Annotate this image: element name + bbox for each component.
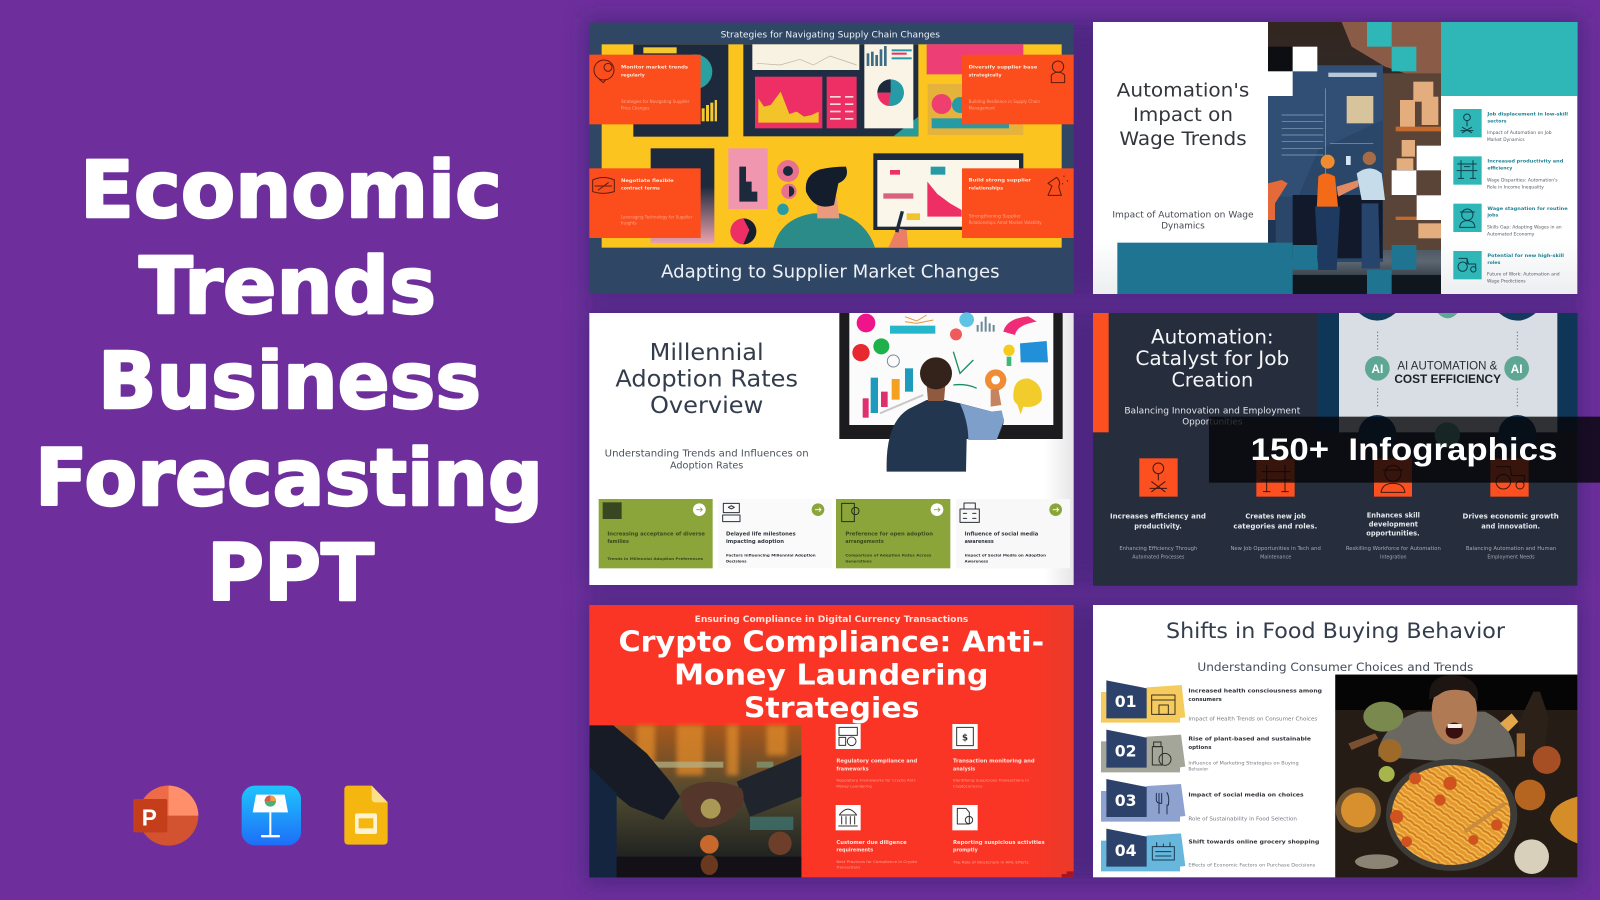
item: regulatory compliance: Money Laundering [836,784,872,789]
item: high-skill roles: Potential for new high-skill [1487,253,1564,259]
row 02: 02 [1115,742,1137,761]
row 01: consumers [1188,697,1222,703]
callout: monitor market trends [589,55,701,124]
item: transaction monitoring: Transaction monitoring and [953,759,1035,765]
card: open adoption: arrangements [845,539,884,545]
slide subtitle: Understanding Consumer Choices and Trends [1197,660,1473,674]
callout: monitor market trends: regularly [621,72,645,78]
illustration: analyst at yellow dashboard wall [602,44,1062,248]
item: reporting suspicious activities: Reporting suspicious activities [953,840,1045,846]
slide title: Creation [1171,369,1253,392]
item: efficiency: Enhancing Efficiency Through [1119,546,1197,552]
item: customer due diligence: Customer due diligence [836,840,907,846]
slide title: Impact on [1133,104,1233,126]
panel: millennial adoption rates [589,312,1074,585]
icon: building [960,503,979,522]
icon: Keynote [242,786,301,845]
item: customer due diligence: Transactions [835,865,860,870]
item: new jobs: New Job Opportunities in Tech and [1230,546,1321,552]
item: productivity: Increased productivity and [1487,159,1563,165]
card: social media awareness: Impact of Social Media on Adoption [965,553,1046,558]
callout: negotiate flexible contract terms: Leveraging Technology for Supplier [621,214,693,219]
icon: contract [593,177,614,193]
icon: robot arm [1150,463,1167,492]
row 04: 04 [1115,841,1137,860]
illustration: warehouse workers [1268,22,1441,294]
arrow button [693,503,706,516]
callout: monitor market trends: Price Changes [621,105,649,110]
item: wage stagnation: jobs [1486,213,1498,219]
row 01: 01 [1115,692,1137,711]
slide title: Strategies [744,691,919,724]
item: growth [1462,458,1559,560]
row 03: 03 [1115,791,1137,810]
item: productivity: Wage Disparities: Automation's [1487,177,1558,183]
slide title: Shifts in Food Buying Behavior [1166,619,1505,644]
item: new jobs: categories and roles. [1233,523,1317,531]
card: open adoption: Preference for open adoption [845,531,934,537]
title: Business [98,337,481,427]
panel: crypto compliance [589,605,1074,877]
callout: diversify supplier base: Management [969,105,995,110]
callout: monitor market trends: Monitor market trends [621,65,688,71]
callout: build strong supplier relationships: Build strong supplier [969,178,1032,184]
card: social media awareness [956,499,1070,568]
item: high-skill roles [1453,251,1564,285]
illustration: AI automation poster: AI [1371,362,1383,376]
icon: document with pin [842,503,859,522]
slide subtitle: Strategies for Navigating Supply Chain Changes [721,30,940,40]
icon: certificate [957,808,973,824]
icon: robot arm [1461,114,1473,133]
callout: diversify supplier base [962,55,1074,124]
item: high-skill roles: Wage Predictions [1487,279,1526,285]
icon: bank [839,809,857,826]
card: diverse families [599,499,713,568]
item: reporting suspicious activities [952,805,1045,865]
item: new jobs: Maintenance [1260,554,1291,560]
slide title: Adoption Rates [615,365,798,393]
panel: automation job creation [1093,313,1600,586]
illustration: man at whiteboard [839,312,1063,472]
card: delayed life milestones [718,499,832,568]
illustration: AI automation poster: COST EFFICIENCY [1394,372,1501,386]
icon: laptop graduation [723,503,740,522]
title: Trends [139,242,436,332]
item: reporting suspicious activities: The Role of Blockchain in AML Efforts [952,860,1029,865]
item: transaction monitoring [952,724,1035,789]
callout: build strong supplier relationships [962,168,1074,238]
row 02 [1101,730,1311,772]
slide title [1135,325,1289,392]
icon: tractor [1496,467,1524,489]
row 02: Behavior [1188,766,1208,772]
title: Economic [80,146,502,236]
row 01 [1101,680,1322,723]
illustration: AI automation poster [1317,313,1577,453]
card: diverse families: Trends in Millennial Adoption Preferences [607,556,704,561]
item: customer due diligence: requirements [836,848,873,854]
slide subtitle: Impact of Automation on Wage [1112,210,1254,220]
photo: laughing man with food [1335,675,1577,877]
panel: automation wage trends [1093,22,1577,294]
icon: qr code [603,502,622,519]
corner mark [1062,871,1074,877]
slide subtitle [1124,406,1301,427]
item: job displacement: sectors [1487,118,1507,124]
item: reporting suspicious activities: promptly [953,848,979,854]
row 04 [1101,829,1319,871]
slide subtitle: Dynamics [1161,221,1205,231]
slide title: Automation: [1151,325,1274,348]
row 01: Increased health consciousness among [1188,688,1322,694]
slide title: Adapting to Supplier Market Changes [661,262,1000,283]
panel: food buying behavior [1093,605,1577,877]
row 04: Shift towards online grocery shopping [1188,840,1319,846]
arrow button [931,503,943,516]
item: productivity: Role in Income Inequality [1487,184,1544,190]
item: productivity [1453,156,1563,190]
illustration: AI automation poster: AI AUTOMATION & [1397,360,1498,373]
banner: 150+ Infographics: 150+ Infographics [1251,431,1557,467]
row 03: Role of Sustainability in Food Selection [1188,816,1297,822]
illustration: AI automation poster: AI [1511,362,1523,376]
icon: money [839,727,857,746]
item: growth: Balancing Automation and Human [1466,546,1556,552]
item: regulatory compliance: Regulatory Frameworks for Crypto Anti- [836,778,917,783]
item: efficiency: productivity. [1134,523,1182,531]
callout: monitor market trends: Strategies for Navigating Supplier [621,99,690,104]
card: diverse families: Increasing acceptance of diverse [607,531,706,537]
callout: build strong supplier relationships: Relationships Amid Market Volatility [969,220,1042,225]
item: regulatory compliance: Regulatory compliance and [836,759,918,765]
item: growth: Drives economic growth [1462,512,1559,520]
slide title: Automation's [1117,80,1249,102]
card: delayed life milestones: Delayed life milestones [726,531,796,537]
icon: worker [1381,465,1405,492]
item: skills: development [1369,520,1419,528]
icon: grocery basket [1152,843,1174,860]
card: social media awareness: Awareness [965,559,989,564]
icon: worker [1460,209,1475,227]
slide subtitle: Ensuring Compliance in Digital Currency Transactions [695,615,968,625]
row 02: Rise of plant-based and sustainable [1188,736,1311,742]
slide title: Money Laundering [674,659,988,692]
card: delayed life milestones: impacting adoption [726,539,785,545]
slide title: Millennial [650,338,764,366]
item: efficiency: Automated Processes [1132,554,1185,560]
callout: negotiate flexible contract terms: Negotiate flexible [621,178,674,184]
item: job displacement: Market Dynamics [1487,137,1525,143]
callout: diversify supplier base: Building Resilience in Supply Chain [969,99,1040,104]
item: customer due diligence [835,805,918,870]
callout: negotiate flexible contract terms: contract terms [621,186,660,192]
icon: conveyor machine [1457,161,1477,178]
slide subtitle: Balancing Innovation and Employment [1124,406,1301,416]
callout: diversify supplier base: strategically [969,72,1002,78]
row 04: Effects of Economic Factors on Purchase Decisions [1188,862,1316,868]
slide subtitle [1112,210,1254,231]
card: open adoption: Comparison of Adoption Rates Across [845,553,932,558]
item: skills: Enhances skill [1367,511,1420,519]
item: wage stagnation: Automated Economy [1487,232,1535,238]
arrow button [812,503,824,516]
decorative tile mosaic [1117,22,1577,294]
slide title [1117,80,1249,150]
callout: build strong supplier relationships: Strengthening Supplier [969,214,1021,219]
callout: build strong supplier relationships: relationships [969,185,1003,191]
item: skills: Reskilling Workforce for Automation [1346,546,1441,552]
icon: machine [1262,465,1290,492]
callout: diversify supplier base: Diversify supplier base [969,65,1037,71]
row 03: Impact of social media on choices [1188,793,1304,799]
item: new jobs [1230,458,1321,560]
item: efficiency [1110,458,1206,560]
slide subtitle: Opportunities [1182,417,1243,427]
icon: PowerPoint [133,786,198,846]
title: PPT [207,529,374,619]
title: Forecasting [35,434,543,524]
panel: supplier market changes [589,23,1074,294]
item: regulatory compliance: frameworks [836,766,869,772]
slide subtitle [605,448,809,471]
row 02: Influence of Marketing Strategies on Buying [1188,760,1299,766]
item: growth: and innovation. [1481,523,1540,531]
software icons [133,786,388,846]
icon: tractor [1458,258,1476,272]
item: growth: Employment Needs [1487,554,1535,560]
slide subtitle: Understanding Trends and Influences on [605,448,809,459]
item: productivity: efficiency [1487,165,1512,171]
icon: Google Slides [344,786,388,845]
banner: 150+ Infographics [1209,417,1600,483]
icon: chess knight [1048,176,1067,195]
slide title [618,626,1044,724]
row 03 [1101,779,1304,822]
callout: negotiate flexible contract terms: Insights [621,220,637,225]
card: delayed life milestones: Decisions [726,559,747,564]
item: job displacement: Job displacement in low-skill [1486,111,1568,117]
icon: storefront [1152,695,1175,714]
item: efficiency: Increases efficiency and [1110,512,1206,520]
slide title [615,338,798,419]
item: skills [1346,458,1441,560]
slide title: Catalyst for Job [1135,347,1289,370]
item: transaction monitoring: analysis [953,766,975,772]
item: customer due diligence: Best Practices for Compliance in Crypto [836,859,918,864]
card: delayed life milestones: Factors Influencing Millennial Adoption [726,553,816,558]
item: high-skill roles: roles [1487,260,1501,266]
slide subtitle: Adoption Rates [670,460,743,471]
item: regulatory compliance [836,724,918,789]
photo: handshake with coins [589,725,801,877]
slide title: Overview [650,391,763,419]
icon: jars with apple [1152,742,1171,765]
callout: negotiate flexible contract terms [589,168,701,238]
card: open adoption: Generations [845,559,872,564]
card: open adoption [836,499,950,568]
row 02: options [1188,745,1211,751]
item: wage stagnation: Wage stagnation for routine [1487,206,1568,212]
icon: fork and knife [1156,793,1169,814]
item: skills: Integration [1380,554,1407,560]
item: wage stagnation: Skills Gap: Adapting Wages in an [1487,225,1562,231]
card: diverse families: families [607,539,629,545]
icon: PowerPoint: P [142,804,157,830]
slide title: Crypto Compliance: Anti- [618,626,1044,659]
icon: worker [1051,61,1065,83]
accent bar [1093,313,1109,432]
item: job displacement: Impact of Automation on Job [1487,130,1552,136]
arrow button [1049,503,1062,516]
item: wage stagnation [1453,204,1568,238]
slide title: Wage Trends [1119,128,1247,150]
item: job displacement [1453,109,1568,143]
title [35,146,543,619]
card: social media awareness: Influence of social media [965,531,1038,537]
item: new jobs: Creates new job [1245,512,1306,520]
item: transaction monitoring: $ [962,733,968,743]
icon: ledger [957,727,973,746]
card: social media awareness: awareness [965,539,994,545]
icon: brain gear [594,60,614,83]
item: high-skill roles: Future of Work: Automation and [1487,272,1560,278]
item: transaction monitoring: Identifying Suspicious Transactions in [953,778,1030,783]
item: skills: opportunities. [1366,530,1420,538]
item: transaction monitoring: Cryptocurrency [953,784,983,789]
row 01: Impact of Health Trends on Consumer Choices [1188,716,1318,722]
